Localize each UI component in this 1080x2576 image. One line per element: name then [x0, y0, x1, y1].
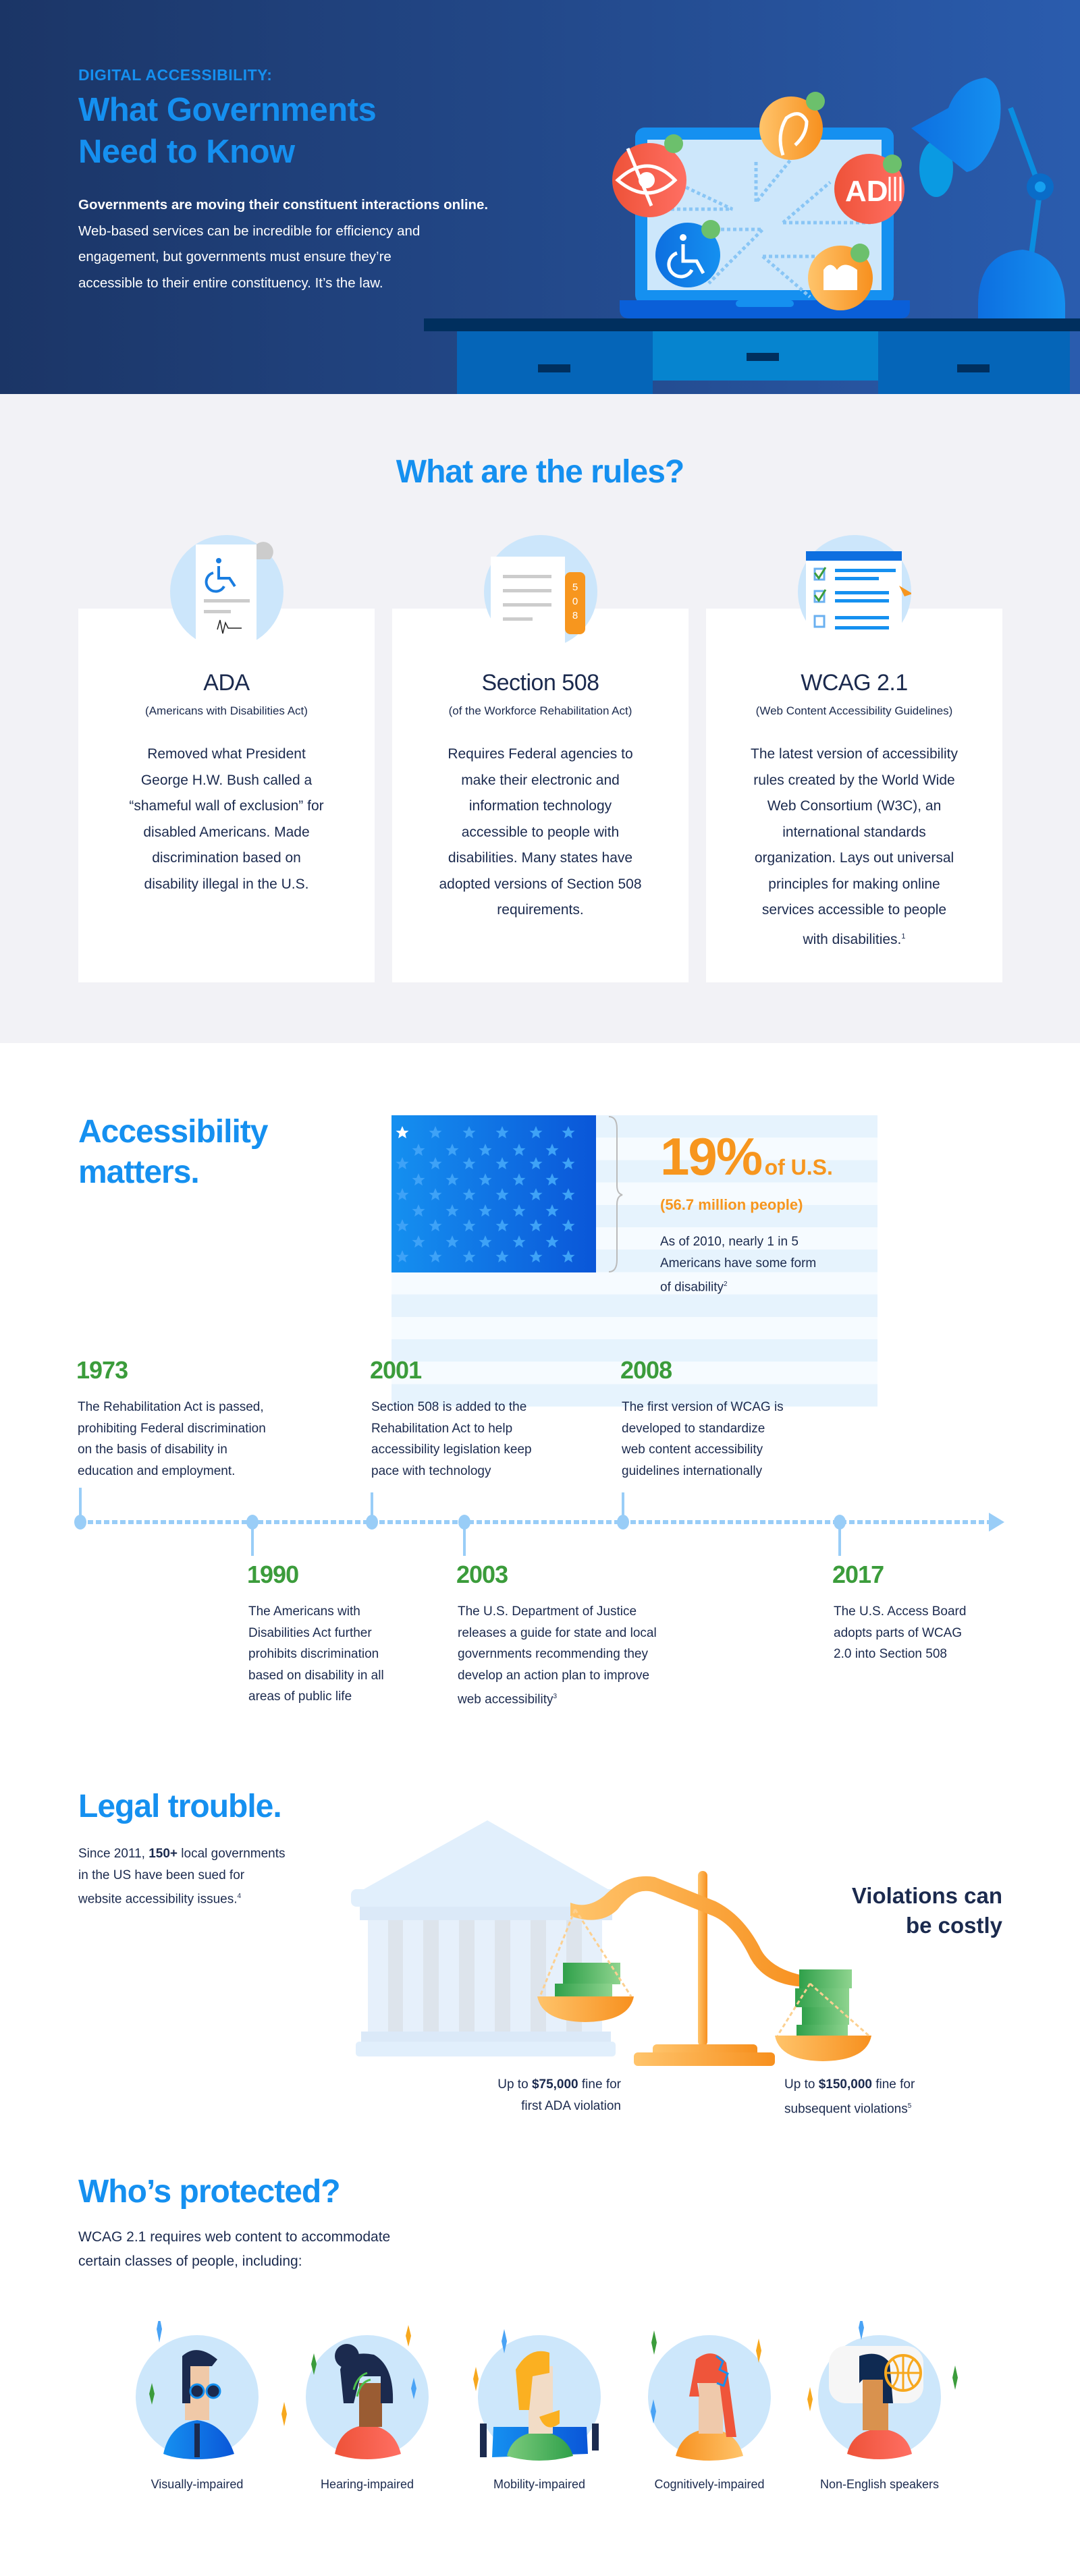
legal text: in the US have been sued for [78, 1868, 244, 1882]
event 1973 [76, 1356, 266, 1478]
money stacks [563, 1963, 620, 1984]
caption: first violation [497, 2077, 621, 2113]
accessibility icon badges: AD [845, 175, 888, 208]
card: WCAG 2.1: WCAG 2.1 [801, 670, 908, 696]
flag graphic with stat [392, 1115, 878, 1407]
event 2001: accessibility legislation keep [371, 1443, 532, 1457]
header intro text [78, 197, 488, 290]
header intro text: accessible to their entire constituency. It’s the law. [78, 275, 383, 290]
card: WCAG 2.1: with disabilities.1 [803, 931, 906, 947]
event 2008 [620, 1356, 784, 1478]
header banner [0, 0, 1080, 394]
header title: What Governments [78, 92, 376, 128]
card: WCAG 2.1 [706, 609, 1002, 982]
pans [537, 1996, 634, 2022]
flag canton [392, 1115, 596, 1272]
icon: ADA document [170, 535, 284, 648]
laptop [620, 128, 910, 318]
card: WCAG 2.1: services accessible to people [762, 902, 946, 918]
card: ADA: discrimination based on [152, 850, 301, 866]
icon: 508 document: 8 [572, 610, 578, 621]
card: WCAG 2.1: organization. Lays out universal [755, 850, 954, 866]
event 1990: areas of public life [248, 1689, 352, 1704]
card: Section 508: Section 508 [481, 670, 599, 696]
event 2008: web content accessibility [622, 1443, 763, 1457]
legal text [78, 1847, 285, 1906]
icon: 508 document [484, 535, 597, 648]
header intro text: engagement, but governments must ensure they’re [78, 249, 392, 264]
person: visually impaired [136, 2335, 259, 2459]
stat text: As of 2010, nearly 1 in 5 [660, 1235, 799, 1249]
protected intro text [78, 2229, 390, 2269]
stat text: Americans have some form [660, 1256, 816, 1270]
card: Section 508: requirements. [497, 902, 584, 918]
event 2001: pace with technology [371, 1464, 491, 1478]
timeline [74, 1488, 1004, 1556]
illustration: laptop desk lamp [424, 78, 1080, 394]
stat: million: (56.7 million people) [660, 1196, 803, 1213]
event 2008: developed to standardize [622, 1421, 765, 1436]
rules heading: What are the rules? [396, 454, 684, 490]
event 2001: Section 508 is added to the [371, 1400, 526, 1414]
header eyebrow: DIGITAL ACCESSIBILITY: [78, 66, 272, 84]
card: WCAG 2.1: (Web Content Accessibility Guidelines) [756, 704, 952, 717]
event 2001: 2001 [370, 1356, 421, 1384]
card: Section 508: adopted versions of Section 508 [439, 876, 642, 892]
event 2008: 2008 [620, 1356, 672, 1384]
card: ADA: disabled Americans. Made [143, 824, 310, 839]
card: ADA: disability illegal in the U.S. [144, 876, 308, 892]
stat text [660, 1235, 816, 1294]
header title: Need to Know [78, 134, 295, 170]
card: Section 508: Requires Federal agencies to [448, 746, 633, 762]
legal text: Since 2011, 150+ local governments [78, 1847, 285, 1861]
event 2003: 2003 [456, 1561, 508, 1588]
heading: accessibility matters: matters. [78, 1154, 199, 1190]
card: ADA [78, 609, 375, 982]
header title [78, 92, 376, 170]
event 2001 [370, 1356, 532, 1478]
card: ADA: (Americans with Disabilities Act) [145, 704, 308, 717]
icon: 508 document: 5 [572, 582, 578, 593]
event 1990: based on disability in all [248, 1668, 384, 1683]
card: ADA: ADA [203, 670, 250, 696]
person: cognitively impaired [648, 2335, 771, 2461]
label: non-English speakers: Non-English speakers [820, 2477, 939, 2491]
event 2017: The U.S. Access Board [834, 1604, 966, 1619]
people icons [136, 2321, 958, 2461]
callout: violations costly [852, 1883, 1002, 1938]
callout: violations costly: Violations can [852, 1883, 1002, 1908]
event 1973: 1973 [76, 1356, 128, 1384]
icon: WCAG checklist [798, 535, 911, 648]
scale [537, 1871, 871, 2066]
card: Section 508: accessible to people with [462, 824, 619, 839]
card: Section 508: (of the Workforce Rehabilitation Act) [449, 704, 632, 717]
event 2003: governments recommending they [458, 1647, 648, 1661]
caption: first violation: Up to $75,000 fine for [497, 2077, 621, 2092]
event 2003: web accessibility3 [458, 1692, 557, 1706]
event 1990: prohibits discrimination [248, 1647, 379, 1661]
card: WCAG 2.1: principles for making online [768, 876, 940, 892]
card: Section 508 [392, 609, 688, 982]
header intro text: Governments are moving their constituent interactions online. [78, 197, 488, 213]
card: ADA: “shameful wall of exclusion” for [129, 798, 324, 814]
event 2001: Rehabilitation Act to help [371, 1421, 512, 1436]
card: ADA: George H.W. Bush called a [141, 772, 312, 788]
section: what are the rules [0, 394, 1080, 1043]
protected intro text: WCAG 2.1 requires web content to accommodate [78, 2229, 390, 2245]
event 1973: The Rehabilitation Act is passed, [78, 1400, 264, 1414]
legal text: website accessibility issues.4 [78, 1892, 241, 1906]
event 2008: The first version of WCAG is [622, 1400, 784, 1414]
stat: 19%: 19% of U.S. [660, 1127, 833, 1186]
timeline axis [88, 1513, 1004, 1532]
event 1990: 1990 [247, 1561, 298, 1588]
person: hearing impaired [306, 2335, 429, 2459]
callout: violations costly: be costly [906, 1913, 1002, 1938]
event 2003 [456, 1561, 657, 1706]
heading: legal trouble: Legal trouble. [78, 1789, 281, 1824]
heading: accessibility matters: Accessibility [78, 1114, 267, 1150]
courthouse [351, 1820, 621, 2056]
event 2008: guidelines internationally [622, 1464, 762, 1478]
card: WCAG 2.1: rules created by the World Wide [753, 772, 955, 788]
event 2017: adopts parts of WCAG [834, 1626, 962, 1640]
person: non-English speakers [818, 2335, 941, 2459]
event 2003: develop an action plan to improve [458, 1668, 649, 1683]
event 2017: 2017 [832, 1561, 884, 1588]
label: cognitively impaired: Cognitively-impaired [654, 2477, 765, 2491]
card: Section 508: disabilities. Many states have [448, 850, 632, 866]
card: Section 508: information technology [469, 798, 612, 814]
event 2017: 2.0 into Section 508 [834, 1647, 947, 1661]
card: ADA: Removed what President [147, 746, 306, 762]
card: WCAG 2.1: international standards [782, 824, 926, 839]
accessibility icon badges [612, 92, 905, 310]
event 1990: Disabilities Act further [248, 1626, 372, 1640]
protected intro text: certain classes of people, including: [78, 2253, 302, 2269]
card: WCAG 2.1: The latest version of accessibility [751, 746, 958, 762]
label: visually impaired: Visually-impaired [151, 2477, 243, 2491]
caption: first violation: first ADA violation [521, 2098, 621, 2113]
label: hearing impaired: Hearing-impaired [321, 2477, 414, 2491]
label: mobility impaired: Mobility-impaired [493, 2477, 585, 2491]
caption: subsequent violations: subsequent violations5 [784, 2102, 911, 2116]
illustration: courthouse and scale [351, 1820, 871, 2066]
event 2017 [832, 1561, 966, 1661]
card: Section 508: make their electronic and [461, 772, 620, 788]
header intro text: Web-based services can be incredible for efficiency and [78, 223, 420, 239]
event 2003: The U.S. Department of Justice [458, 1604, 637, 1619]
stat text: of disability2 [660, 1280, 728, 1294]
lamp [911, 78, 1065, 318]
sparkles [149, 2316, 958, 2426]
event 1990 [247, 1561, 384, 1704]
brace [609, 1116, 622, 1272]
icon: 508 document: 0 [572, 596, 578, 607]
person: mobility impaired [478, 2335, 601, 2461]
caption: subsequent violations [784, 2077, 915, 2116]
event 1973: education and employment. [78, 1464, 235, 1478]
event 1973: prohibiting Federal discrimination [78, 1421, 266, 1436]
desk [424, 318, 1080, 394]
heading: accessibility matters [78, 1114, 269, 1190]
event 1990: The Americans with [248, 1604, 360, 1619]
heading: who's protected: Who’s protected? [78, 2174, 340, 2210]
caption: subsequent violations: Up to $150,000 fine for [784, 2077, 915, 2092]
event 1973: on the basis of disability in [78, 1443, 227, 1457]
event 2003: releases a guide for state and local [458, 1626, 657, 1640]
card: WCAG 2.1: Web Consortium (W3C), an [767, 798, 941, 814]
